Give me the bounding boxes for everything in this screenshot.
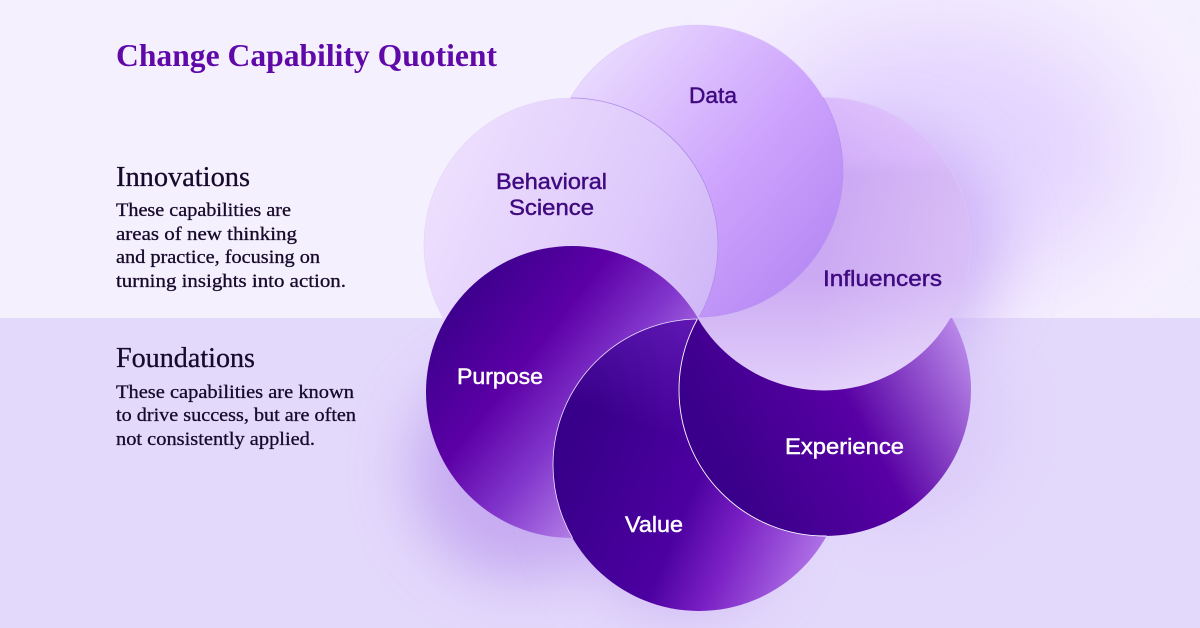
description: innovations: and practice, focusing on — [116, 248, 320, 268]
description: foundations — [116, 383, 356, 450]
circle: Data — [551, 25, 843, 317]
text block: foundations — [116, 343, 356, 450]
heading: innovations: Innovations — [116, 162, 250, 193]
label: Influencers: Influencers — [823, 266, 942, 291]
description: innovations: turning insights into action. — [116, 272, 346, 292]
label: Purpose: Purpose — [457, 364, 543, 389]
description: innovations: areas of new thinking — [116, 225, 297, 245]
label: Behavioral Science: Science — [509, 195, 594, 220]
background: innovations band — [0, 0, 1200, 318]
circle: Influencers tip over Experience — [698, 318, 950, 390]
soft glow behind circles — [410, 20, 1130, 615]
label: Behavioral Science: Behavioral — [496, 169, 607, 194]
circle: Value — [553, 319, 845, 611]
heading: foundations: Foundations — [116, 343, 255, 374]
label: Experience: Experience — [785, 434, 904, 459]
circle: Behavioral Science — [424, 98, 718, 318]
background: foundations band — [0, 318, 1200, 628]
description: innovations — [116, 201, 346, 292]
circle: Experience — [678, 318, 971, 536]
label: Data: Data — [689, 83, 738, 108]
label: Value: Value — [625, 512, 683, 537]
text block: innovations — [116, 162, 346, 292]
description: foundations: not consistently applied. — [116, 430, 315, 450]
description: foundations: to drive success, but are often — [116, 406, 356, 426]
title: Change Capability Quotient — [116, 37, 497, 73]
circle: Purpose — [426, 246, 718, 538]
description: innovations: These capabilities are — [116, 201, 291, 221]
description: foundations: These capabilities are known — [116, 383, 354, 403]
circle: Influencers — [678, 98, 970, 390]
label: Behavioral Science — [496, 169, 607, 220]
